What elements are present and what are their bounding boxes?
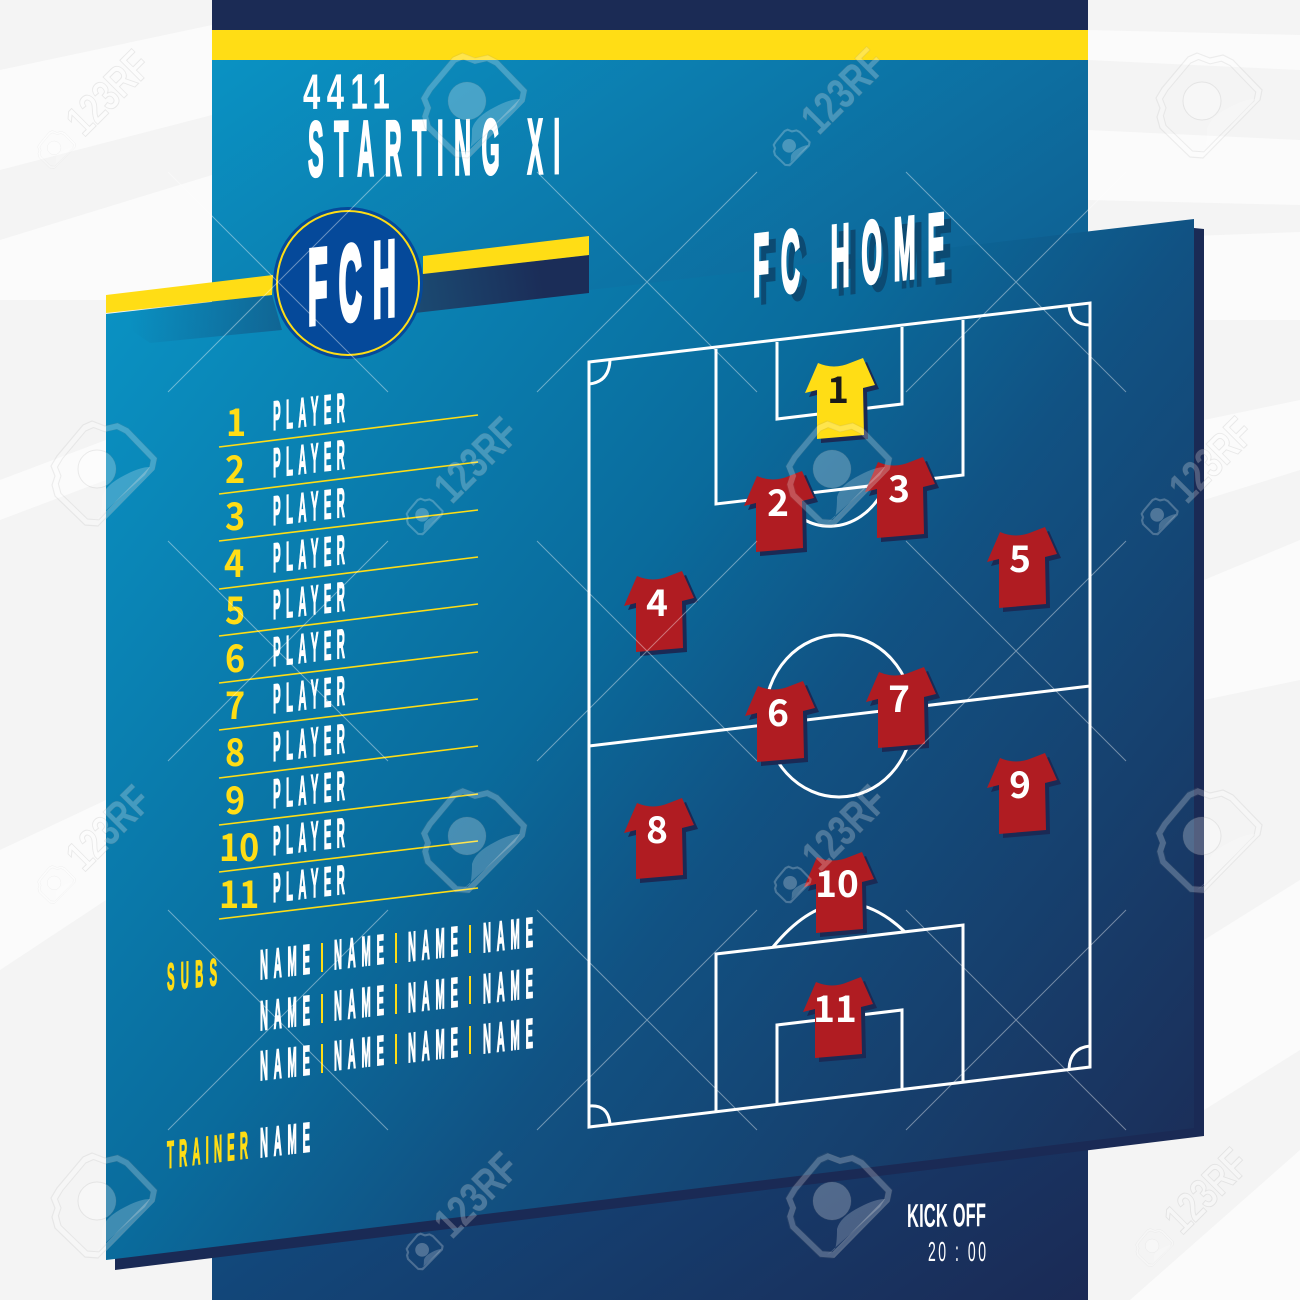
player list: 8 bbox=[225, 723, 245, 778]
club band bbox=[106, 236, 589, 343]
player list: PLAYER bbox=[273, 622, 345, 676]
player list: PLAYER bbox=[273, 386, 345, 440]
trainer label: TRAINER bbox=[167, 1124, 248, 1176]
shirt 11 bbox=[803, 977, 877, 1062]
watermark text marks: 123RF bbox=[57, 42, 161, 145]
subs names bbox=[260, 911, 533, 1090]
subs names: NAME bbox=[334, 1029, 384, 1080]
subs names: NAME bbox=[408, 971, 458, 1022]
shirt 6 bbox=[745, 681, 819, 766]
player list: PLAYER bbox=[273, 669, 345, 723]
player list bbox=[219, 386, 478, 920]
skewed main panel bbox=[106, 219, 1194, 1260]
subs names: NAME bbox=[483, 911, 533, 962]
shirt 3 bbox=[865, 457, 939, 542]
skewed panel shadow bbox=[115, 228, 1204, 1270]
subs names: NAME bbox=[483, 1012, 533, 1063]
subs names: NAME bbox=[483, 962, 533, 1013]
team name: FC HOME bbox=[753, 194, 945, 315]
shirt 3: 3 bbox=[888, 459, 910, 513]
small watermark stamps bbox=[38, 129, 1179, 1270]
player list: 10 bbox=[219, 818, 259, 873]
subs names: NAME bbox=[260, 938, 310, 989]
player list: 9 bbox=[225, 771, 245, 826]
shirt 9: 9 bbox=[1009, 755, 1031, 809]
shirt 4 bbox=[624, 571, 698, 656]
shirt 8: 8 bbox=[646, 800, 668, 854]
player list: PLAYER bbox=[273, 575, 345, 629]
player list: PLAYER bbox=[273, 858, 345, 912]
club badge: FCH bbox=[308, 218, 396, 347]
player list: PLAYER bbox=[273, 433, 345, 487]
football pitch lines bbox=[589, 303, 1090, 1127]
subs names: NAME bbox=[408, 920, 458, 971]
player list: 6 bbox=[225, 629, 245, 684]
watermark text marks: 123RF bbox=[425, 409, 529, 512]
player list: 7 bbox=[225, 676, 245, 731]
player list: 1 bbox=[226, 393, 246, 448]
shirt 5: 5 bbox=[1009, 529, 1031, 583]
shirt 2 bbox=[744, 471, 818, 556]
shirt 7 bbox=[866, 667, 940, 752]
watermark text marks: 123RF bbox=[793, 777, 897, 880]
subs names: NAME bbox=[260, 989, 310, 1040]
watermark guide crosses bbox=[168, 172, 1126, 1130]
player list: 4 bbox=[224, 534, 244, 589]
kick off time: 20 : 00 bbox=[928, 1236, 986, 1267]
player list: PLAYER bbox=[273, 717, 345, 771]
shirt 1 goalkeeper bbox=[805, 358, 879, 443]
watermark text marks: 123RF bbox=[792, 40, 896, 143]
kick off label: KICK OFF bbox=[907, 1196, 986, 1235]
top yellow band bbox=[212, 30, 1088, 60]
shirt 7: 7 bbox=[888, 669, 910, 723]
subs names: NAME bbox=[408, 1021, 458, 1072]
player list: PLAYER bbox=[273, 811, 345, 865]
player list: 3 bbox=[225, 487, 245, 542]
shirt 6: 6 bbox=[767, 683, 789, 737]
subs names: NAME bbox=[260, 1039, 310, 1090]
player list: PLAYER bbox=[273, 528, 345, 582]
subs names: NAME bbox=[334, 979, 384, 1030]
shirt 11: 11 bbox=[813, 979, 857, 1033]
team name: FC HOME bbox=[760, 201, 952, 322]
shirt 5 bbox=[987, 527, 1061, 612]
player list: PLAYER bbox=[273, 764, 345, 818]
shirt 2: 2 bbox=[767, 473, 789, 527]
player list: 11 bbox=[219, 865, 259, 920]
watermark text marks: 123RF bbox=[1160, 409, 1264, 512]
watermark text marks: 123RF bbox=[1155, 1140, 1259, 1243]
watermark text marks: 123RF bbox=[57, 777, 161, 880]
shirt 4: 4 bbox=[646, 573, 668, 627]
shirt 1 goalkeeper: 1 bbox=[827, 360, 849, 414]
subs label: SUBS bbox=[167, 951, 217, 998]
club badge bbox=[273, 207, 423, 359]
central poster panel bbox=[212, 0, 1088, 1300]
player list: PLAYER bbox=[273, 481, 345, 535]
shirt 10: 10 bbox=[815, 854, 859, 908]
title: formation: 4411 bbox=[303, 63, 390, 120]
title: starting xi: STARTING XI bbox=[308, 104, 560, 194]
top navy band bbox=[212, 0, 1088, 30]
shirt 9 bbox=[987, 753, 1061, 838]
shirt 10 bbox=[804, 852, 878, 937]
player list: 2 bbox=[225, 440, 245, 495]
subs names: NAME bbox=[334, 928, 384, 979]
trainer name: NAME bbox=[260, 1116, 310, 1167]
watermark text marks: 123RF bbox=[425, 1144, 529, 1247]
shirt 8 bbox=[624, 798, 698, 883]
player list: 5 bbox=[225, 581, 245, 636]
